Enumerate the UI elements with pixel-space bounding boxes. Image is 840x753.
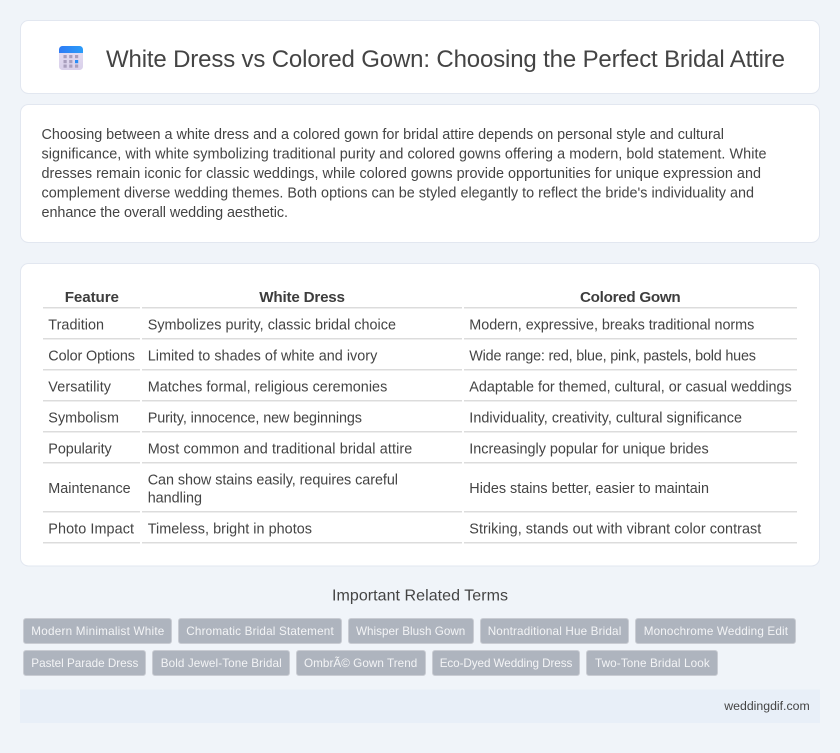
tag xyxy=(348,618,474,644)
tag: Pastel Parade Dress xyxy=(31,657,138,670)
tag: Whisper Blush Gown xyxy=(356,625,465,638)
panel: introduction xyxy=(20,104,820,242)
icon: calendar xyxy=(59,46,83,70)
tag xyxy=(152,650,290,676)
table header row: White Dress xyxy=(259,289,345,306)
tag: OmbrÃ© Gown Trend xyxy=(304,657,417,670)
row: tradition: Modern, expressive, breaks traditional norms xyxy=(469,317,754,333)
row: popularity: Popularity xyxy=(48,441,112,457)
tag: Eco-Dyed Wedding Dress xyxy=(440,657,572,670)
row: maintenance: Hides stains better, easier to maintain xyxy=(469,481,709,497)
row: symbolism: Purity, innocence, new beginnings xyxy=(148,410,362,426)
tag: Two-Tone Bridal Look xyxy=(595,657,710,670)
text block: introduction paragraph: significance, with white symbolizing traditional purity and colored gowns offering a modern, bold statement. White xyxy=(42,146,766,162)
tag xyxy=(432,650,580,676)
row: photo impact: Timeless, bright in photos xyxy=(148,521,312,537)
row: popularity: Most common and traditional bridal attire xyxy=(148,441,412,457)
row: tradition: Symbolizes purity, classic bridal choice xyxy=(148,317,396,333)
text block: introduction paragraph xyxy=(42,127,766,221)
row: symbolism xyxy=(43,410,797,432)
footer bar xyxy=(20,690,820,723)
tag xyxy=(296,650,426,676)
row: color options: Limited to shades of white and ivory xyxy=(148,348,378,364)
row: color options: Color Options xyxy=(48,348,135,364)
row: popularity: Increasingly popular for unique brides xyxy=(469,441,709,457)
tag xyxy=(586,650,718,676)
footer source text: weddingdif.com xyxy=(723,699,810,713)
row: photo impact: Striking, stands out with vibrant color contrast xyxy=(469,521,761,537)
row: tradition: Tradition xyxy=(48,317,104,333)
tag xyxy=(178,618,342,644)
text block: introduction paragraph: complement diverse wedding themes. Both options can be styled elegantly to reflect the bride's individuality and xyxy=(42,186,754,202)
row: maintenance: Can show stains easily, requires careful xyxy=(148,472,398,488)
table header row: Feature xyxy=(65,289,119,306)
row: versatility: Versatility xyxy=(48,379,112,395)
text block: introduction paragraph: enhance the overall wedding aesthetic. xyxy=(42,205,288,221)
row: maintenance xyxy=(43,472,797,512)
row: versatility: Matches formal, religious ceremonies xyxy=(148,379,387,395)
row: photo impact: Photo Impact xyxy=(48,521,134,537)
row: symbolism: Individuality, creativity, cultural significance xyxy=(469,410,742,426)
text block: introduction paragraph: Choosing between a white dress and a colored gown for bridal attire depends on personal style and cultural xyxy=(42,127,724,143)
row: maintenance: Maintenance xyxy=(48,481,131,497)
row: versatility xyxy=(43,379,797,402)
table header row xyxy=(43,289,797,308)
row: tradition xyxy=(43,317,797,340)
heading: important related terms: Important Related Terms xyxy=(332,588,508,605)
panel: related term tags xyxy=(24,618,796,676)
row: popularity xyxy=(43,441,797,464)
tag xyxy=(636,618,796,644)
tag: Nontraditional Hue Bridal xyxy=(488,625,621,638)
tag xyxy=(24,618,172,644)
tag: Monochrome Wedding Edit xyxy=(644,625,789,638)
table header row: Colored Gown xyxy=(580,289,681,306)
row: photo impact xyxy=(43,521,797,544)
row: maintenance: handling xyxy=(148,490,202,506)
row: color options xyxy=(43,348,797,370)
panel: comparison table xyxy=(20,264,820,566)
row: symbolism: Symbolism xyxy=(48,410,119,426)
tag xyxy=(24,650,146,676)
tag xyxy=(480,618,628,644)
text block: introduction paragraph: dresses remain iconic for classic weddings, while colored gowns provide opportunities for unique expression and xyxy=(42,166,761,182)
tag: Bold Jewel-Tone Bridal xyxy=(161,657,282,670)
panel: title header xyxy=(20,20,820,94)
tag: Modern Minimalist White xyxy=(31,625,164,638)
title: White Dress vs Colored Gown: Choosing the Perfect Bridal Attire xyxy=(106,46,785,73)
row: color options: Wide range: red, blue, pink, pastels, bold hues xyxy=(469,348,756,364)
tag: Chromatic Bridal Statement xyxy=(186,625,334,638)
row: versatility: Adaptable for themed, cultural, or casual weddings xyxy=(469,379,792,395)
